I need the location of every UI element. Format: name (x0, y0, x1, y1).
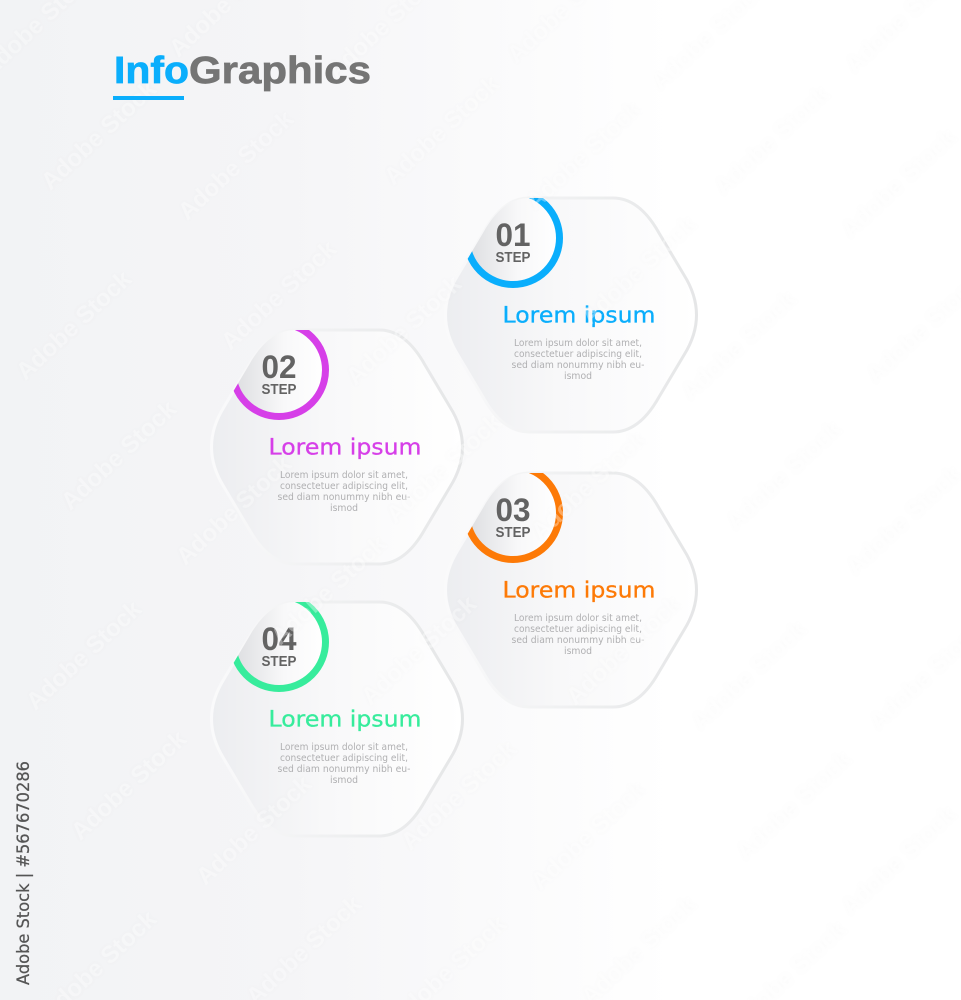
description: ismod (330, 775, 358, 786)
watermark pattern: Adobe Stock (721, 415, 847, 535)
watermark pattern: Adobe Stock (11, 265, 137, 385)
watermark pattern: Adobe Stock (836, 123, 961, 243)
description: Lorem ipsum dolor sit amet, (514, 338, 642, 349)
step number: 01 (496, 217, 530, 253)
title underline (113, 96, 184, 100)
watermark pattern: Adobe Stock (676, 285, 802, 405)
description: sed diam nonummy nibh eu- (278, 492, 410, 503)
step number: 04 (262, 621, 297, 657)
watermark pattern: Adobe Stock (709, 80, 835, 200)
title (113, 50, 371, 100)
watermark pattern: Adobe Stock (396, 735, 522, 855)
description: sed diam nonummy nibh eu- (512, 360, 644, 371)
watermark pattern: Adobe Stock (341, 270, 467, 390)
description: Lorem ipsum dolor sit amet, (514, 613, 642, 624)
description (512, 338, 644, 382)
heading: Lorem ipsum (268, 436, 422, 460)
watermark pattern: Adobe Stock (66, 725, 192, 845)
watermark pattern: Adobe Stock (526, 775, 652, 895)
heading: Lorem ipsum (502, 304, 656, 328)
description: consectetuer adipiscing elit, (280, 481, 408, 492)
description: Lorem ipsum dolor sit amet, (280, 742, 408, 753)
panel: step 01 (446, 192, 696, 432)
watermark pattern: Adobe Stock (216, 235, 342, 355)
step label: STEP (262, 653, 296, 670)
heading: Lorem ipsum (502, 578, 656, 604)
panel: step 04 (212, 596, 462, 836)
watermark pattern: Adobe Stock (381, 408, 507, 528)
watermark pattern: Adobe Stock (836, 800, 961, 920)
hexagon card (446, 473, 696, 707)
hexagon card (212, 330, 462, 564)
title word: Graphics: Graphics (189, 50, 371, 92)
stock id side label: Adobe Stock | #567670286 (14, 761, 34, 985)
description: sed diam nonummy nibh eu- (512, 635, 644, 646)
description: sed diam nonummy nibh eu- (278, 764, 410, 775)
watermark pattern: Adobe Stock (36, 75, 162, 195)
step number: 02 (262, 349, 296, 385)
progress circle (232, 324, 326, 416)
watermark pattern: Adobe Stock (521, 95, 647, 215)
progress circle (466, 192, 560, 284)
description: consectetuer adipiscing elit, (514, 349, 642, 360)
panel: step 03 (446, 466, 696, 707)
description: ismod (564, 646, 592, 657)
description (278, 742, 410, 786)
watermark pattern: Adobe Stock (191, 770, 317, 890)
hexagon card (446, 198, 696, 432)
watermark pattern: Adobe Stock (686, 615, 812, 735)
watermark pattern: Adobe Stock (21, 595, 147, 715)
progress circle (466, 466, 560, 560)
heading: Lorem ipsum (268, 708, 422, 732)
watermark pattern: Adobe Stock (173, 105, 299, 225)
watermark pattern: Adobe Stock (379, 70, 505, 190)
watermark pattern: Adobe Stock (731, 745, 857, 865)
step label: STEP (496, 249, 530, 266)
watermark pattern: Adobe Stock (561, 590, 687, 710)
description: consectetuer adipiscing elit, (514, 624, 642, 635)
watermark pattern: Adobe Stock (356, 590, 482, 710)
step label: STEP (262, 381, 296, 398)
step number: 03 (496, 492, 530, 528)
watermark pattern: Adobe Stock (171, 450, 297, 570)
watermark pattern: Adobe Stock (576, 210, 702, 330)
progress circle (232, 596, 326, 688)
description: consectetuer adipiscing elit, (280, 753, 408, 764)
watermark pattern: Adobe Stock (526, 425, 652, 545)
description (278, 470, 410, 514)
panel: step 02 (212, 324, 462, 564)
watermark pattern: Adobe Stock (266, 530, 392, 650)
step label: STEP (496, 524, 530, 541)
description: ismod (330, 503, 358, 514)
description: ismod (564, 371, 592, 382)
watermark pattern: Adobe Stock (56, 395, 182, 515)
description: Lorem ipsum dolor sit amet, (280, 470, 408, 481)
hexagon card (212, 602, 462, 836)
title word: Info: Info (114, 50, 189, 92)
description (512, 613, 644, 657)
